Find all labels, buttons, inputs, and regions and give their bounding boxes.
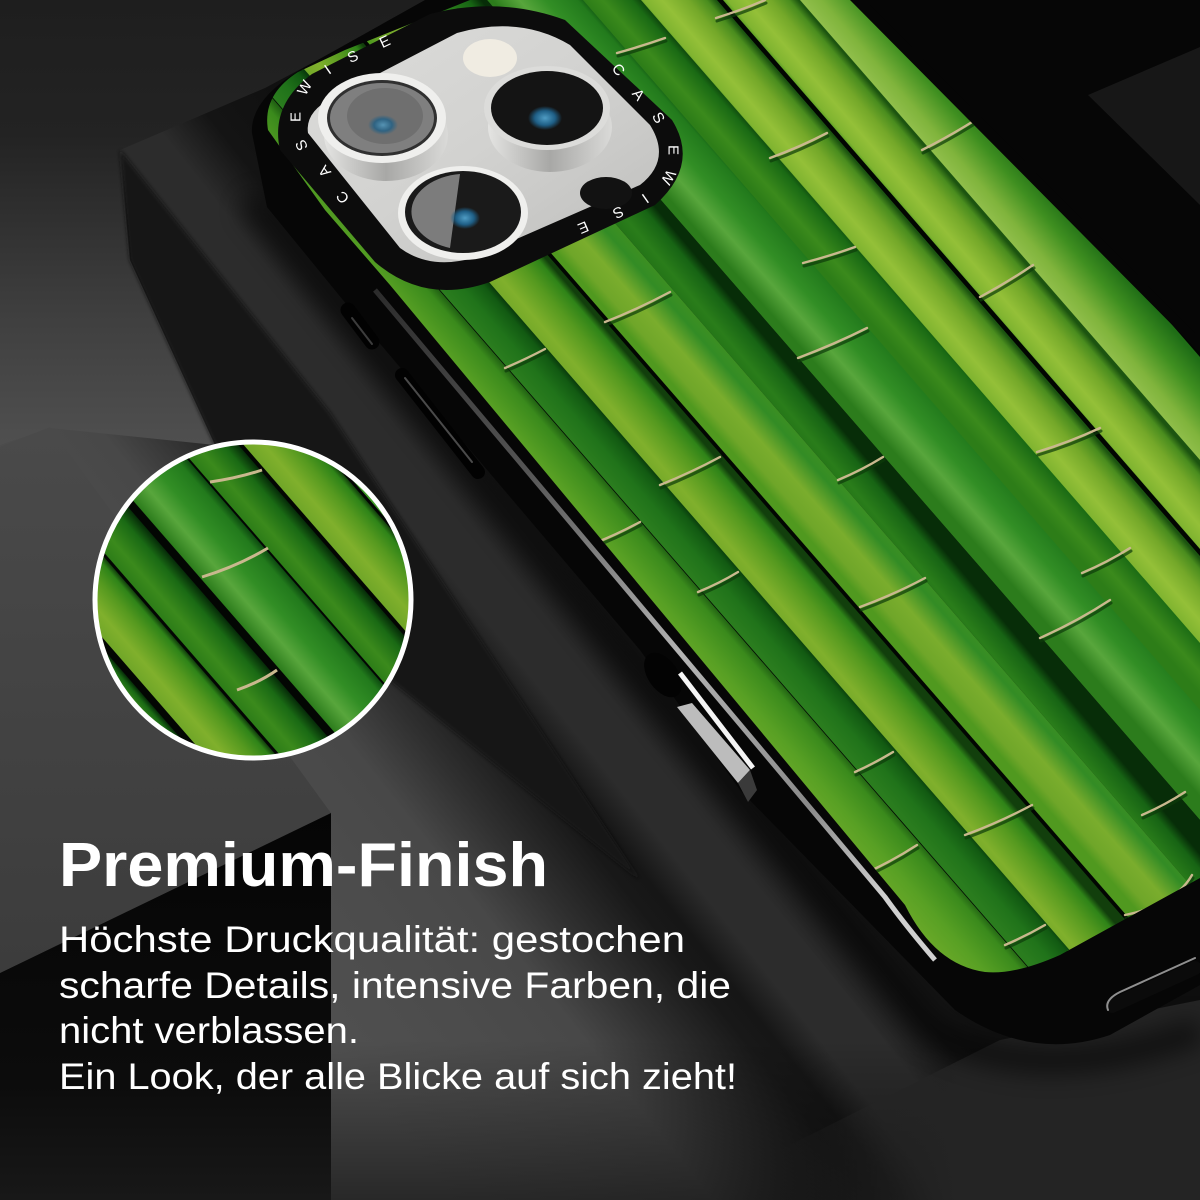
bamboo print: [267, 0, 1200, 972]
phone case: [252, 0, 1200, 1044]
camera island: [278, 6, 683, 290]
camera bezel: [278, 6, 683, 290]
flash: [463, 39, 517, 77]
brand ring text: C: [608, 60, 628, 80]
magnified bamboo: [98, 444, 408, 756]
body text: Höchste Druckqualität: gestochen: [59, 919, 685, 960]
brand ring text: E: [664, 145, 682, 155]
side button small: [348, 310, 372, 344]
body text: Ein Look, der alle Blicke auf sich zieht!: [59, 1056, 737, 1097]
body text: scharfe Details, intensive Farben, die: [59, 965, 731, 1006]
brand ring text: A: [315, 162, 335, 180]
sensor dot: [580, 177, 632, 209]
brand ring text: I: [638, 190, 652, 206]
body text: nicht verblassen.: [59, 1010, 359, 1051]
brand ring text: W: [294, 77, 316, 98]
rim highlight: [375, 290, 935, 960]
brand ring text: [288, 32, 682, 237]
lens bottom: [398, 166, 528, 260]
silver action button: [636, 646, 757, 802]
magnified nodes: [202, 470, 277, 690]
brand ring text: S: [292, 137, 312, 153]
body text: [59, 919, 737, 1097]
brand ring text: E: [288, 112, 304, 122]
phone shadow: [250, 200, 1200, 1060]
bamboo nodes: [505, 0, 1193, 948]
brand ring text: S: [648, 109, 668, 127]
brand ring text: S: [610, 202, 626, 222]
case body: [252, 0, 1200, 1044]
brand ring text: S: [345, 47, 361, 67]
charging port: [1107, 958, 1195, 1010]
circle border: [95, 442, 411, 758]
brand ring text: E: [377, 32, 393, 52]
side button long: [402, 375, 478, 472]
brand ring text: E: [575, 217, 591, 237]
lens top left: [318, 73, 448, 181]
lens top right: [484, 66, 612, 172]
brand ring text: A: [628, 86, 648, 104]
brand ring text: I: [321, 62, 335, 78]
detail magnifier circle: [92, 440, 414, 760]
camera glass: [308, 26, 659, 262]
brand ring text: W: [657, 167, 679, 188]
brand ring text: C: [333, 187, 353, 207]
heading: Premium-Finish: [59, 831, 548, 900]
